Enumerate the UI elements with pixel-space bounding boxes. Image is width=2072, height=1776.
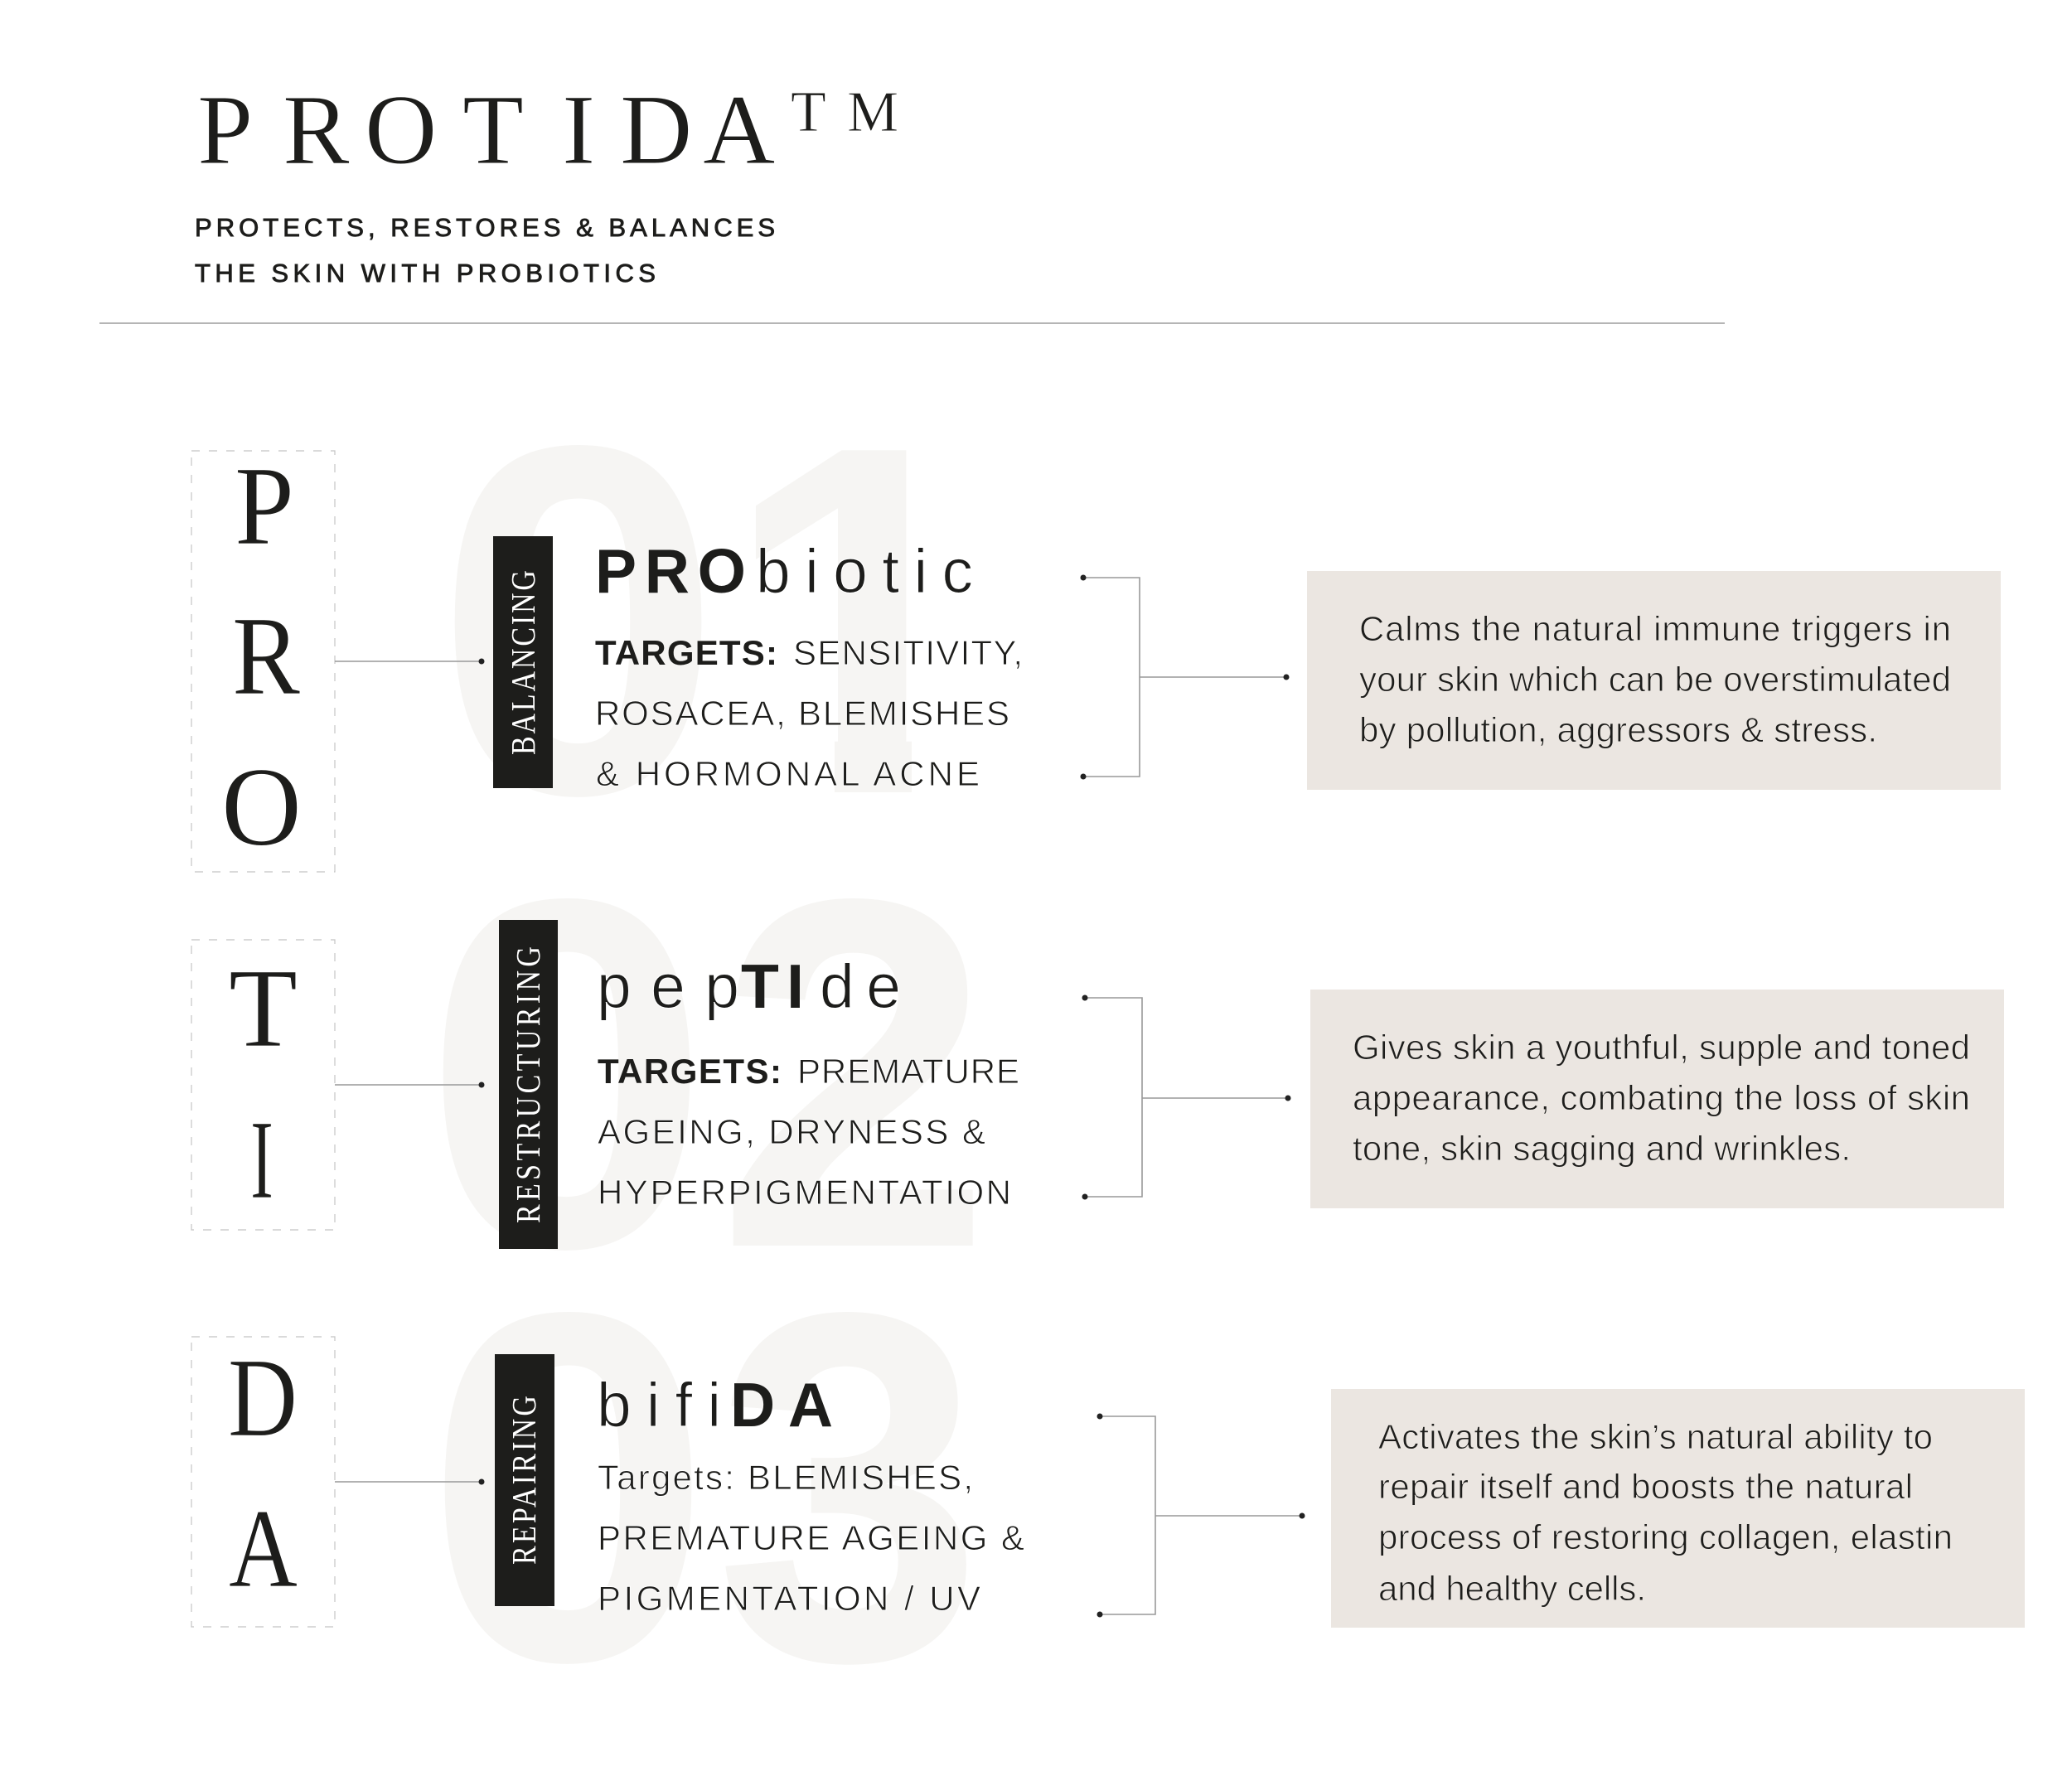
heading: bifiDA: [597, 1370, 833, 1440]
subtitle: [195, 213, 775, 288]
targets: pepTIde: TARGETS:: [598, 1052, 782, 1091]
title: TM: [791, 80, 898, 144]
label bar: restructuring: RESTRUCTURING: [511, 946, 548, 1223]
targets: PRObiotic: ROSACEA, BLEMISHES: [595, 694, 1009, 733]
panel: bifiDA description: [1331, 1389, 2025, 1628]
panel: PRO letters: O: [221, 745, 302, 869]
background number 02: 0: [423, 796, 711, 1352]
panel: PRO letters: [191, 444, 335, 872]
subtitle: PROTECTS, RESTORES & BALANCES: [195, 213, 775, 242]
bracket: PRObiotic: [1081, 575, 1290, 779]
heading: bifiDA: DA: [730, 1370, 833, 1440]
heading: pepTIde: [597, 951, 901, 1021]
background number 03: 3: [714, 1210, 984, 1765]
panel: TI letters: T: [229, 946, 298, 1071]
targets: bifiDA: PIGMENTATION / UV: [598, 1579, 980, 1618]
panel: TI letters: [191, 940, 335, 1230]
background number 03: [424, 1210, 984, 1765]
panel: bifiDA description: process of restoring collagen, elastin: [1378, 1517, 1953, 1556]
targets: PRObiotic: & HORMONAL ACNE: [596, 754, 980, 793]
panel: bifiDA description: Activates the skin’s natural ability to: [1378, 1417, 1933, 1456]
background number 03: 0: [424, 1210, 713, 1765]
heading: pepTIde: pep: [597, 951, 739, 1021]
targets: bifiDA: Targets: BLEMISHES,: [598, 1458, 973, 1497]
heading: bifiDA: bifi: [597, 1370, 721, 1440]
background number 02: 2: [716, 796, 993, 1352]
connector: DA to bar: [335, 1478, 484, 1485]
targets: pepTIde: HYPERPIGMENTATION: [598, 1173, 1011, 1212]
bracket: pepTIde: [1082, 994, 1291, 1200]
connector: TI to bar: [335, 1082, 484, 1087]
panel: DA letters: D: [228, 1336, 298, 1460]
background number 01: 1: [722, 343, 999, 898]
panel: PRObiotic description: your skin which can be overstimulated: [1359, 660, 1951, 699]
label bar: balancing: BALANCING: [506, 570, 543, 755]
subtitle: THE SKIN WITH PROBIOTICS: [195, 259, 656, 288]
panel: TI letters: I: [250, 1098, 274, 1222]
heading: PRObiotic: [595, 536, 973, 606]
panel: pepTIde description: Gives skin a youthful, supple and toned: [1353, 1028, 1970, 1067]
targets: pepTIde: PREMATURE: [797, 1052, 1019, 1091]
targets: PRObiotic: [595, 633, 1023, 793]
targets: bifiDA: [598, 1458, 1024, 1618]
targets: PRObiotic: TARGETS:: [595, 633, 777, 672]
connector: PRO to bar: [335, 658, 484, 665]
background number 01: 0: [434, 343, 723, 898]
heading: PRObiotic: biotic: [756, 536, 973, 606]
label bar: repairing: REPAIRING: [506, 1396, 544, 1565]
panel: PRObiotic description: [1307, 571, 2001, 790]
panel: pepTIde description: [1310, 990, 2004, 1208]
heading: PRObiotic: PRO: [595, 536, 746, 606]
background number 02: [423, 796, 993, 1352]
heading: pepTIde: TI: [741, 951, 804, 1021]
panel: DA letters: A: [229, 1487, 298, 1611]
label bar: balancing: [493, 536, 553, 788]
panel: bifiDA description: repair itself and boosts the natural: [1378, 1467, 1913, 1506]
panel: PRO letters: P: [235, 444, 294, 569]
targets: PRObiotic: SENSITIVITY,: [793, 633, 1023, 672]
panel: PRO letters: R: [232, 594, 300, 719]
label bar: restructuring: [499, 920, 558, 1249]
panel: bifiDA description: and healthy cells.: [1378, 1569, 1646, 1608]
targets: bifiDA: PREMATURE AGEING &: [598, 1518, 1024, 1557]
label bar: repairing: [495, 1354, 554, 1606]
background number 01: [455, 445, 912, 797]
heading: pepTIde: de: [820, 951, 901, 1021]
bracket: bifiDA: [1097, 1414, 1305, 1618]
panel: pepTIde description: appearance, combating the loss of skin: [1353, 1078, 1970, 1117]
panel: PRObiotic description: by pollution, aggressors & stress.: [1359, 710, 1877, 749]
panel: PRObiotic description: Calms the natural immune triggers in: [1359, 609, 1951, 648]
targets: pepTIde: [598, 1052, 1019, 1212]
panel: DA letters: [191, 1336, 335, 1627]
targets: pepTIde: AGEING, DRYNESS &: [598, 1112, 985, 1151]
panel: pepTIde description: tone, skin sagging and wrinkles.: [1353, 1129, 1851, 1168]
title: PROTIDA: [197, 75, 775, 186]
